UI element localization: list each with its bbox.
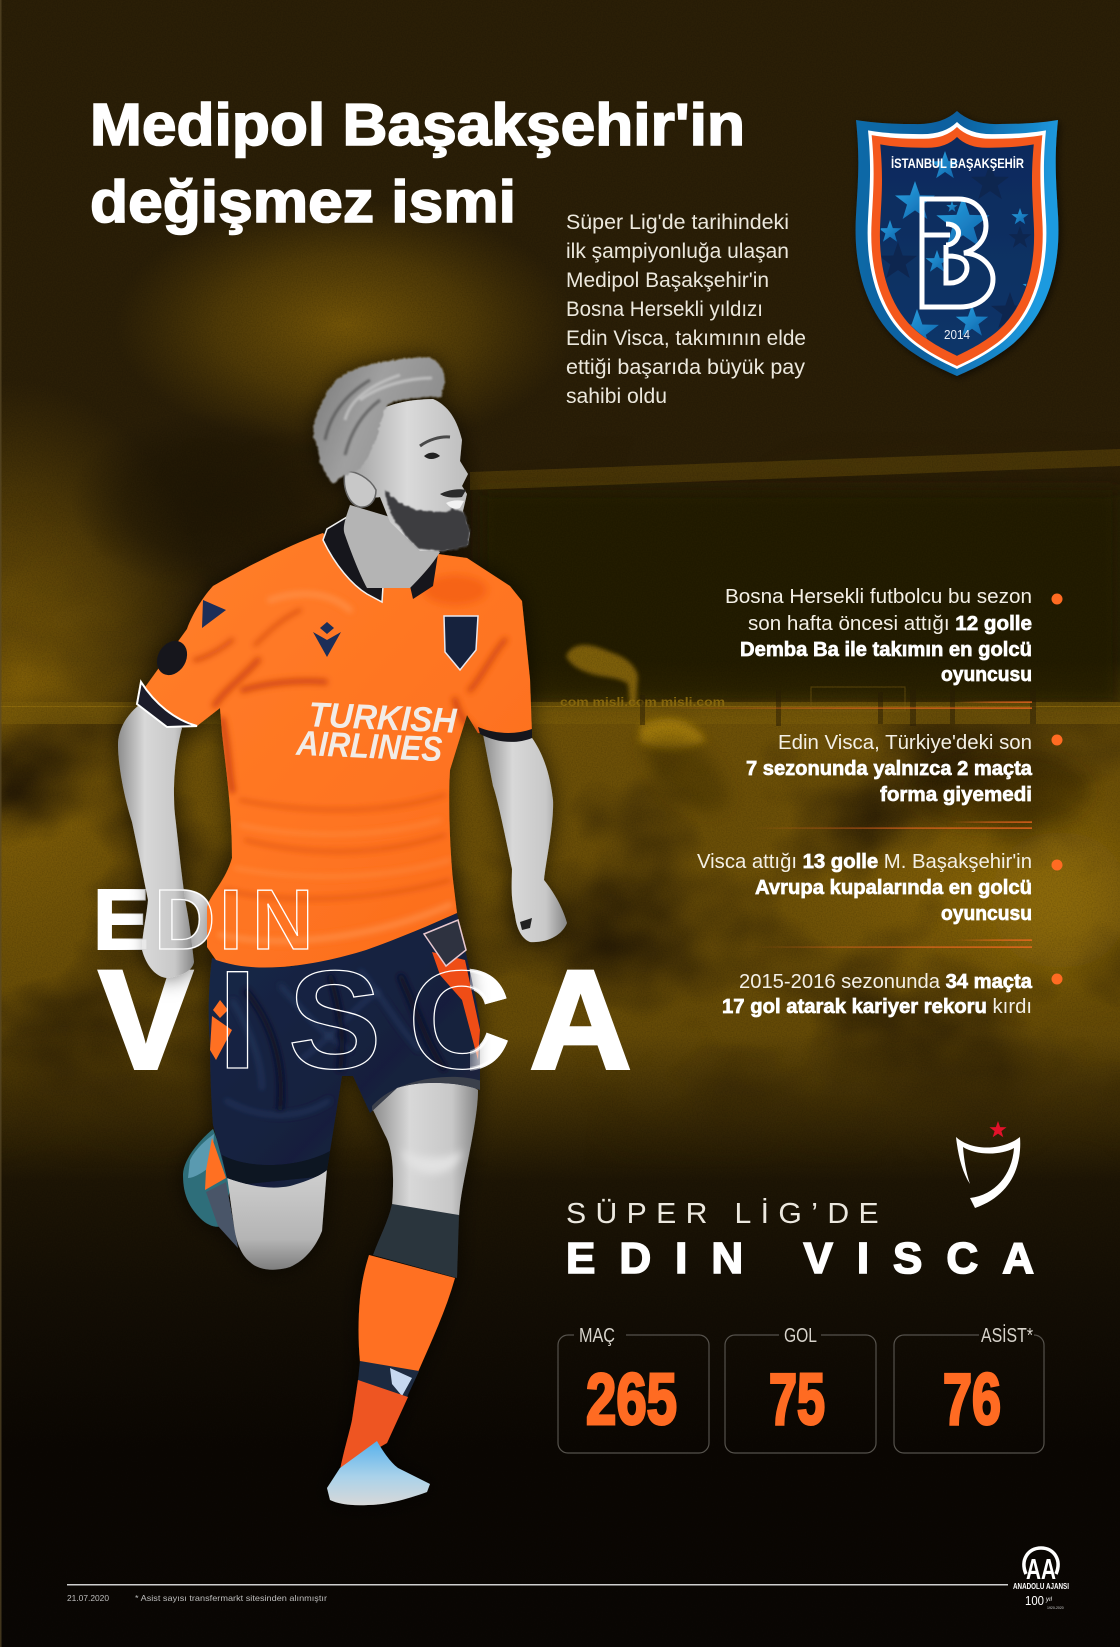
intro text: ettiği başarıda büyük pay bbox=[566, 356, 806, 379]
intro text: ilk şampiyonluğa ulaşan bbox=[566, 240, 789, 263]
title: Medipol Başakşehir'in bbox=[90, 92, 745, 158]
player name: outlined letters over player bbox=[154, 873, 509, 1098]
jersey sponsor bbox=[295, 695, 458, 770]
jersey logo: Macron bbox=[313, 622, 341, 657]
player name: filled letters behind player: VISCA bbox=[99, 941, 631, 1098]
bullet 2: 7 sezonunda yalnızca 2 maçta bbox=[746, 757, 1033, 780]
stats heading bbox=[566, 1197, 1034, 1283]
icon: Anadolu Ajansı logo: 100 bbox=[1025, 1593, 1044, 1608]
bullet 3: Visca attığı 13 golle M. Başakşehir'in bbox=[697, 850, 1032, 873]
crest letter B bbox=[922, 199, 993, 307]
sleeve cuffs bbox=[137, 682, 197, 727]
right leg: thigh and knee bbox=[373, 1079, 478, 1216]
right hand detail: ring bbox=[520, 918, 532, 930]
icon: club crest bbox=[856, 111, 1058, 376]
player name: filled letters behind player: EDIN bbox=[93, 873, 313, 968]
intro text: Süper Lig'de tarihindeki bbox=[566, 211, 789, 234]
stat box: asist bbox=[894, 1324, 1044, 1453]
bullet 4: 2015-2016 sezonunda 34 maçta bbox=[739, 970, 1033, 993]
jersey logo: sleeve Macron bbox=[202, 600, 226, 628]
stat box: maç: 265 bbox=[586, 1360, 677, 1440]
bullet 3: Avrupa kupalarında en golcü bbox=[755, 876, 1032, 899]
background: stadium and smoke: com misli.com misli.com bbox=[560, 695, 725, 709]
player name: outlined letters over player: DIN bbox=[154, 873, 313, 968]
bullet 1: Demba Ba ile takımın en golcü bbox=[740, 638, 1032, 661]
stat box: gol: GOL bbox=[784, 1325, 817, 1347]
bullet 4 bbox=[722, 970, 1062, 1018]
intro text: Bosna Hersekli yıldızı bbox=[566, 298, 763, 321]
player name: letter C fill fading over shorts: C bbox=[408, 941, 509, 1098]
bullet 3 bbox=[697, 850, 1062, 948]
right arm bbox=[483, 734, 567, 942]
footnote: * Asist sayısı transfermarkt sitesinden alınmıştır bbox=[135, 1593, 327, 1603]
right sock: dark band bbox=[373, 1204, 459, 1278]
stat box: asist: 76 bbox=[943, 1360, 1001, 1440]
jersey patch: Europa League bbox=[151, 635, 193, 681]
collar bbox=[323, 517, 383, 602]
bullet 4: 17 gol atarak kariyer rekoru kırdı bbox=[722, 995, 1032, 1018]
footer date: 21.07.2020 bbox=[67, 1593, 109, 1603]
intro text: sahibi oldu bbox=[566, 385, 667, 408]
ear bbox=[344, 472, 376, 507]
title: değişmez ismi bbox=[90, 169, 516, 235]
stats heading: EDIN VISCA bbox=[566, 1234, 1034, 1283]
player name: letter E over arm: E bbox=[93, 873, 150, 968]
bullet 2 bbox=[746, 731, 1062, 829]
intro text bbox=[566, 211, 806, 408]
icon: Anadolu Ajansı logo: AA bbox=[1026, 1554, 1056, 1586]
stat box: gol: 75 bbox=[769, 1360, 825, 1440]
bullet 1: oyuncusu bbox=[941, 663, 1032, 686]
right sock: orange bbox=[358, 1255, 455, 1372]
jersey badge bbox=[444, 616, 478, 670]
left knee bbox=[227, 1168, 327, 1270]
icon: Anadolu Ajansı logo: 1920-2020 bbox=[1047, 1606, 1064, 1610]
crest year: 2014 bbox=[944, 328, 970, 342]
right boot bbox=[327, 1441, 430, 1505]
intro text: Edin Visca, takımının elde bbox=[566, 327, 806, 350]
player name: outlined letters over player: ISC bbox=[218, 941, 509, 1098]
jersey bbox=[137, 517, 532, 967]
shorts badge bbox=[424, 920, 466, 966]
player photo illustration bbox=[118, 358, 567, 1505]
stats heading: SÜPER LİG’DE bbox=[566, 1197, 888, 1230]
icon: Anadolu Ajansı logo: ANADOLU AJANSI bbox=[1013, 1582, 1069, 1591]
bullet 1: son hafta öncesi attığı 12 golle bbox=[748, 612, 1032, 635]
title bbox=[90, 92, 745, 235]
intro text: Medipol Başakşehir'in bbox=[566, 269, 769, 292]
stat box: gol bbox=[725, 1325, 876, 1453]
left arm bbox=[118, 706, 194, 978]
footer line bbox=[67, 1584, 1008, 1586]
head bbox=[313, 358, 470, 551]
stat box: maç bbox=[558, 1325, 709, 1453]
shorts bbox=[209, 913, 484, 1188]
crest name: İSTANBUL BAŞAKŞEHİR bbox=[891, 155, 1024, 171]
jersey sponsor: AIRLINES bbox=[295, 724, 443, 769]
neck bbox=[344, 505, 440, 588]
left leg behind: boot and sock bbox=[183, 1129, 238, 1248]
icon: Anadolu Ajansı logo: yıl bbox=[1045, 1597, 1053, 1603]
stat box: asist: ASİST* bbox=[981, 1324, 1033, 1347]
jersey sponsor: TURKISH bbox=[308, 695, 458, 741]
bullet 3: oyuncusu bbox=[941, 902, 1032, 925]
bullet 2: Edin Visca, Türkiye'deki son bbox=[778, 731, 1032, 754]
right sock: dark ankle band bbox=[358, 1361, 419, 1397]
stat box: maç: MAÇ bbox=[579, 1325, 615, 1347]
player name: filled letters behind player bbox=[93, 873, 631, 1098]
right sock: lower bbox=[340, 1380, 408, 1470]
hair bbox=[313, 358, 444, 483]
panel: bullet facts bbox=[660, 585, 1062, 1018]
bullet 2: forma giyemedi bbox=[880, 783, 1032, 806]
bullet 1 bbox=[660, 585, 1062, 709]
icon: Anadolu Ajansı logo bbox=[1013, 1548, 1069, 1610]
bullet 1: Bosna Hersekli futbolcu bu sezon bbox=[725, 585, 1032, 608]
icon: Süper Lig logo bbox=[956, 1121, 1020, 1208]
